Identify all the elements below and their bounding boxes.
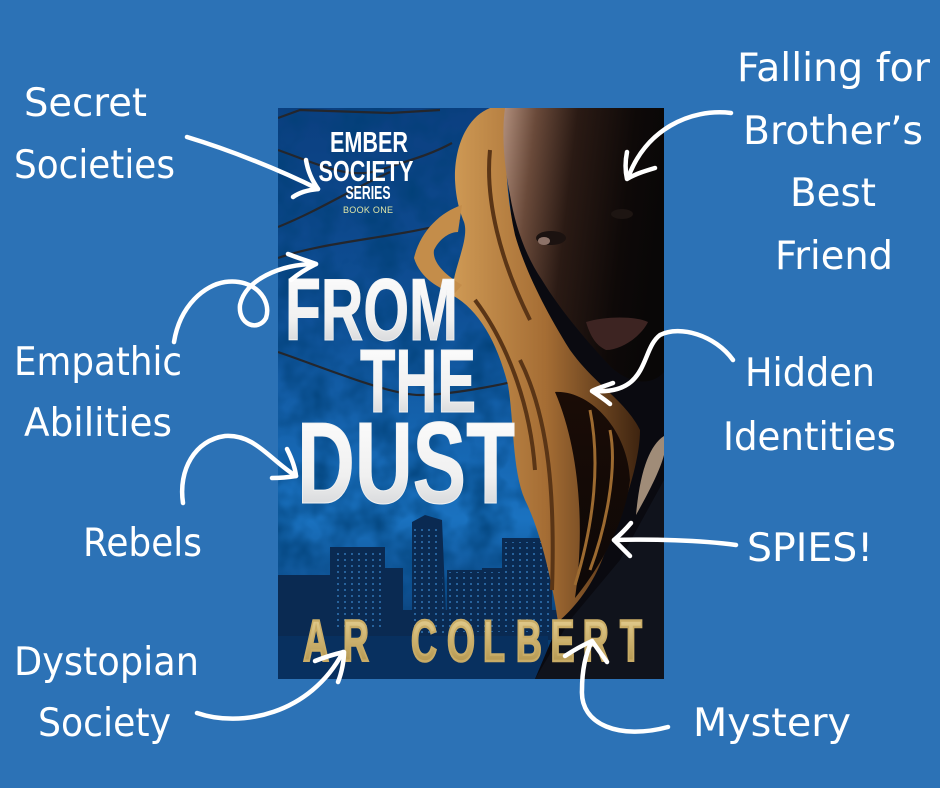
label: Falling for Brother's Best Friend: Falling for bbox=[737, 46, 931, 91]
book cover bbox=[278, 108, 664, 679]
label: Secret Societies bbox=[14, 81, 175, 188]
barbed wire bbox=[278, 110, 520, 395]
series title: EMBER bbox=[330, 127, 408, 159]
woman: hair bbox=[452, 108, 640, 622]
label: Secret Societies: Secret bbox=[24, 81, 147, 126]
shoulder highlight bbox=[636, 436, 664, 515]
book title bbox=[288, 278, 515, 504]
label: Hidden Identities: Identities bbox=[723, 415, 896, 460]
label: Dystopian Society: Society bbox=[38, 701, 171, 746]
label: Hidden Identities: Hidden bbox=[745, 351, 875, 396]
arrow: Falling for Brother's Best Friend bbox=[626, 112, 731, 179]
cover texture bbox=[278, 118, 553, 594]
hair dark streaks bbox=[475, 150, 553, 590]
label: Falling for Brother's Best Friend: Friend bbox=[775, 234, 893, 279]
city skyline bbox=[278, 515, 568, 640]
book title: THE bbox=[360, 332, 476, 432]
label: Secret Societies: Societies bbox=[14, 143, 175, 188]
lips bbox=[586, 318, 648, 350]
label: Empathic Abilities bbox=[14, 340, 182, 446]
arrow: Hidden Identities bbox=[592, 331, 733, 404]
arrow: Secret Societies bbox=[187, 137, 318, 197]
label: Dystopian Society bbox=[14, 640, 199, 746]
series title: BOOK ONE bbox=[343, 205, 393, 215]
arrow: Rebels bbox=[182, 436, 296, 503]
label: Mystery: Mystery bbox=[693, 701, 851, 746]
book title: DUST bbox=[297, 398, 515, 528]
book title: FROM bbox=[285, 260, 458, 359]
label: Falling for Brother's Best Friend bbox=[737, 46, 931, 279]
label: SPIES!: SPIES! bbox=[747, 526, 873, 571]
label: Empathic Abilities: Empathic bbox=[14, 340, 182, 385]
label: Rebels: Rebels bbox=[83, 521, 202, 566]
cover background bbox=[278, 108, 556, 648]
series title: SERIES bbox=[346, 183, 390, 203]
dark lower cover band bbox=[278, 636, 548, 679]
series title bbox=[318, 127, 414, 215]
hair strands bbox=[575, 410, 612, 585]
arrow: Empathic Abilities bbox=[174, 254, 316, 342]
label: Falling for Brother's Best Friend: Brother’s bbox=[743, 109, 923, 154]
arrow: SPIES! bbox=[614, 523, 736, 556]
label: Dystopian Society: Dystopian bbox=[14, 640, 199, 685]
arrow: Mystery bbox=[565, 641, 668, 732]
curl bbox=[414, 205, 462, 293]
hair dark shadow bbox=[555, 392, 630, 598]
city windows bbox=[337, 529, 549, 633]
series title: SOCIETY bbox=[318, 156, 414, 188]
label: Empathic Abilities: Abilities bbox=[24, 401, 172, 446]
label: Hidden Identities bbox=[723, 351, 896, 460]
woman: face bbox=[503, 108, 664, 382]
eye bbox=[536, 231, 566, 245]
author name: ARCOLBERT bbox=[303, 609, 642, 674]
arrow: Dystopian Society bbox=[197, 652, 344, 719]
jacket bbox=[535, 480, 664, 679]
woman: dark body bbox=[508, 182, 664, 679]
label: Falling for Brother's Best Friend: Best bbox=[790, 171, 876, 216]
eye dim bbox=[611, 209, 633, 219]
